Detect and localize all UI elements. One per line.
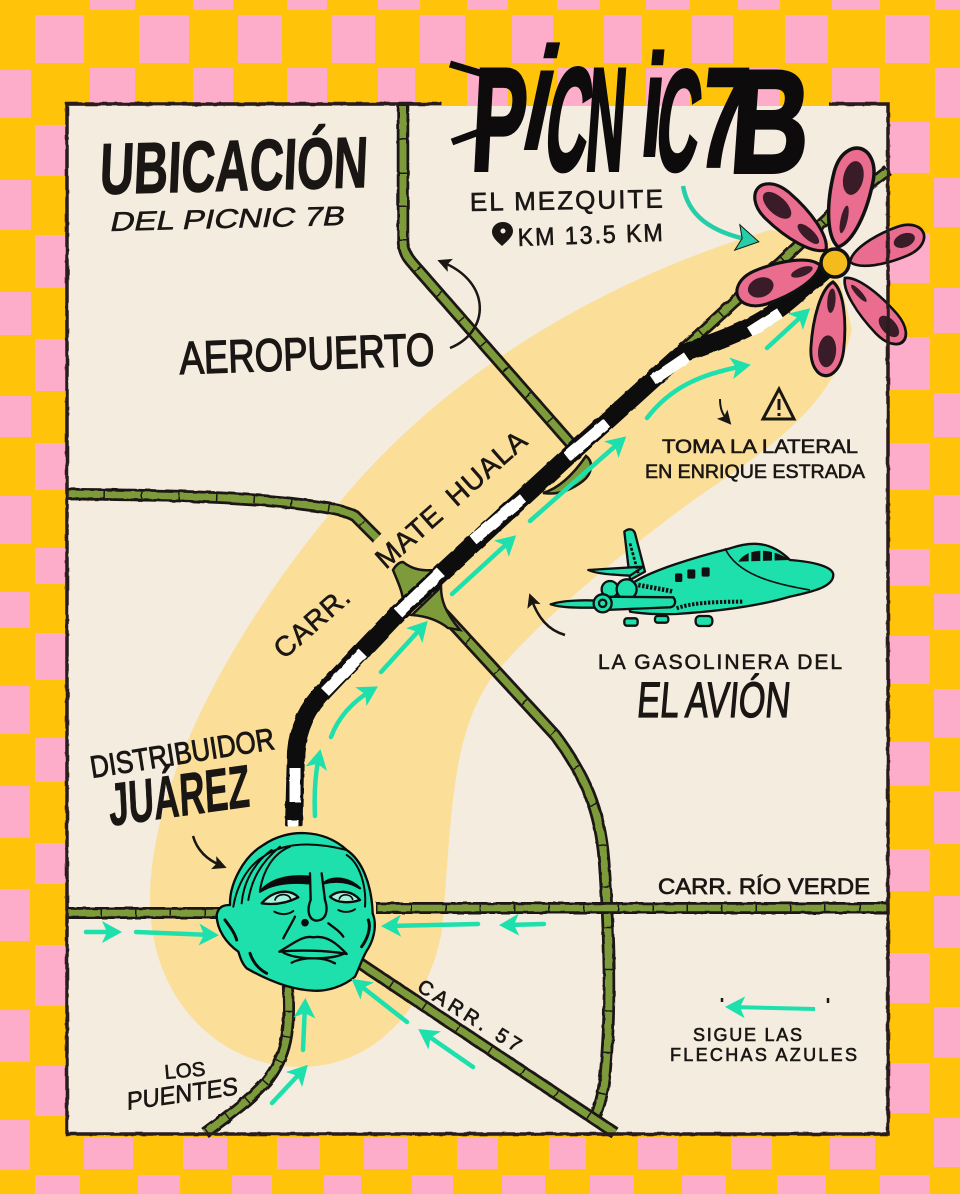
petal upper left — [746, 175, 838, 263]
fuselage — [630, 544, 833, 614]
heading: UBICACIÓN: UBICACIÓN — [98, 122, 370, 210]
tail wing — [588, 567, 643, 576]
label: Aeropuerto: AEROPUERTO — [179, 323, 435, 384]
hair — [233, 845, 365, 907]
label: Carr. Río Verde: CARR. RÍO VERDE — [658, 874, 870, 899]
mouth — [279, 937, 347, 954]
illustration: head of Juárez — [217, 833, 375, 991]
label: El Avión: EL AVIÓN — [635, 672, 793, 728]
petal left — [731, 248, 826, 313]
icon: warning triangle — [763, 389, 794, 419]
arrow: to the flower — [683, 186, 750, 240]
cockpit bars — [750, 548, 773, 562]
label: Los Puentes: PUENTES — [127, 1072, 238, 1116]
title: PICNIC7B: P — [468, 39, 531, 202]
subheading: del Picnic 7B: DEL PICNIC 7B — [108, 200, 349, 237]
head outline — [217, 833, 375, 991]
road: south road from junction — [440, 610, 609, 1115]
arrow: to plane — [531, 598, 565, 635]
windows — [675, 551, 790, 582]
flower center — [821, 249, 849, 277]
title: PICNIC7B: C — [650, 42, 709, 201]
ear and jaw shading — [225, 920, 369, 973]
eyes — [262, 892, 360, 904]
label: Los Puentes: LOS — [164, 1058, 206, 1084]
nose — [309, 873, 327, 921]
petal right — [844, 219, 929, 276]
arrows: follow the blue route — [86, 313, 805, 1103]
illustration: plane — [551, 529, 833, 626]
road: Río Verde — [66, 908, 888, 913]
petal lower right — [834, 268, 913, 351]
road: northeast lateral — [680, 170, 888, 352]
label: El Mezquite: EL MEZQUITE — [470, 184, 665, 217]
tail fin — [624, 529, 645, 580]
engines — [551, 579, 675, 612]
title: PICNIC7B: i — [635, 26, 672, 186]
highway: Carr. Matehuala — [293, 268, 828, 826]
panel border — [67, 104, 888, 1134]
road: Los Puentes — [205, 985, 289, 1133]
petal bottom — [809, 281, 849, 377]
legend: blue arrow — [722, 998, 828, 1009]
nose line and shading — [630, 543, 810, 608]
title: PICNIC7B: i — [511, 19, 571, 179]
warning note arrow — [720, 399, 728, 421]
label: km 13.5 km: KM 13.5 KM — [517, 219, 665, 252]
title: PICNIC7B: C — [537, 37, 602, 201]
legend text: sigue las flechas azules: FLECHAS AZULES — [670, 1045, 857, 1065]
title: PICNIC7B: 7 — [693, 41, 755, 196]
road: top road to highway — [403, 105, 572, 445]
wheels — [624, 616, 712, 626]
label: Juárez: JUÁREZ — [107, 752, 251, 839]
title: PICNIC7B — [450, 19, 815, 204]
legend text: sigue las flechas azules — [670, 1025, 857, 1065]
arrow: to Juárez head — [193, 836, 222, 866]
flower: destination marker — [731, 144, 929, 377]
label: Carr. Matehuala: CARR. MATE HUALA — [267, 424, 533, 664]
legend text: sigue las flechas azules: SIGUE LAS — [693, 1025, 802, 1045]
icon: location pin — [492, 222, 513, 246]
petal top — [818, 144, 879, 251]
note: toma la lateral: TOMA LA LATERAL — [662, 437, 858, 458]
route highlight band — [150, 230, 852, 1067]
label: Distribuidor: DISTRIBUIDOR — [88, 721, 277, 785]
eyebrows — [260, 876, 360, 892]
arrow: to airport — [442, 262, 480, 348]
title: PICNIC7B: N — [582, 39, 631, 202]
junction: green triangles — [393, 456, 591, 630]
road: west road — [66, 494, 377, 538]
label: La gasolinera del: LA GASOLINERA DEL — [598, 651, 842, 674]
note: toma la lateral: EN ENRIQUE ESTRADA — [645, 462, 865, 483]
label: Carr. 57: CARR. 57 — [413, 976, 525, 1057]
panel: map paper — [68, 106, 888, 1134]
road: Carr. 57 — [358, 962, 615, 1133]
note: toma la lateral — [645, 437, 865, 483]
title: PICNIC7B: B — [726, 41, 815, 204]
